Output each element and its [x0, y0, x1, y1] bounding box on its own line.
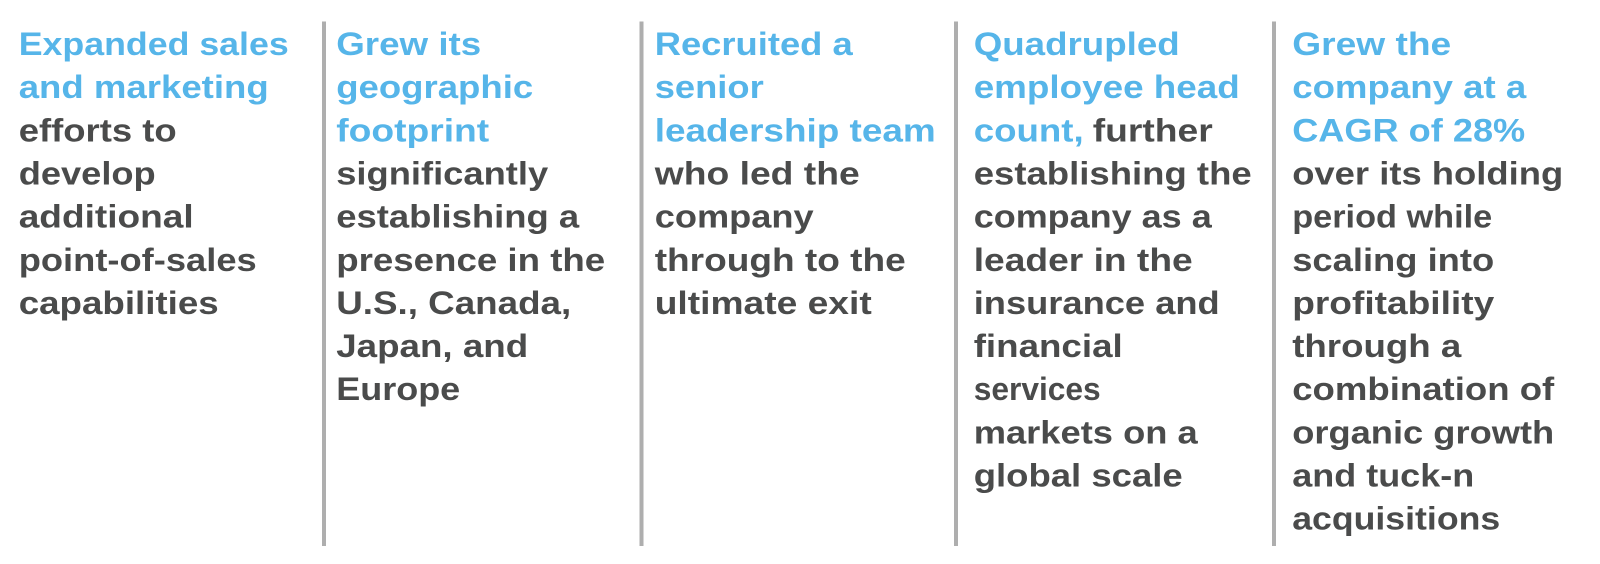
column 2 body text: presence in the — [336, 242, 605, 278]
column 4 body text: services — [974, 371, 1101, 407]
column 3: senior leadership team — [654, 26, 936, 321]
column 5 body text: organic growth — [1292, 414, 1554, 450]
column 4 body text: global scale — [974, 458, 1183, 494]
column 1 body text: capabilities — [19, 285, 219, 321]
column 4 heading: count, — [974, 112, 1084, 148]
column 3 heading: senior — [655, 69, 764, 105]
column 5 body text: over its holding — [1292, 156, 1563, 192]
column 2 heading: footprint — [336, 112, 490, 148]
column 4 body text: leader in the — [974, 242, 1193, 278]
column 4 heading — [974, 26, 1240, 148]
column 5 body text: and tuck-n — [1292, 458, 1474, 494]
column 4: employee head count — [974, 26, 1252, 494]
column 4 body text: insurance and — [974, 285, 1220, 321]
column 2 body text: significantly — [336, 156, 548, 192]
column 4 body text: markets on a — [974, 414, 1198, 450]
column 4 body text: further — [1093, 112, 1213, 148]
column 3 heading: leadership team — [655, 112, 936, 148]
column 4 body text — [974, 112, 1252, 494]
column 1 body text: additional — [19, 199, 194, 235]
column 5 body text — [1292, 156, 1563, 537]
column 3 heading: Recruited a — [655, 26, 853, 62]
column 3 body text: company — [655, 199, 814, 235]
column 4 body text: establishing the — [974, 156, 1252, 192]
column 2 heading — [336, 26, 533, 148]
column 5 heading: Grew the — [1292, 26, 1451, 62]
column 2 body text: Europe — [336, 371, 460, 407]
column 5: company growth — [1292, 26, 1563, 537]
column 2 heading: Grew its — [336, 26, 481, 62]
column 3 body text: ultimate exit — [655, 285, 872, 321]
column 2 body text: Japan, and — [336, 328, 528, 364]
column 4 heading: Quadrupled — [974, 26, 1180, 62]
column 1 heading: Expanded sales — [19, 26, 289, 62]
column 3 body text: through to the — [655, 242, 906, 278]
column 2: geographic footprint — [336, 26, 605, 407]
column 2 body text: U.S., Canada, — [336, 285, 571, 321]
column 5 body text: through a — [1292, 328, 1461, 364]
column 1 body text: point-of-sales — [19, 242, 257, 278]
column 5 body text: acquisitions — [1292, 501, 1500, 537]
column 1 body text — [19, 112, 257, 321]
column 3 body text — [654, 156, 906, 321]
column 5 heading — [1292, 26, 1526, 148]
column 5 body text: combination of — [1292, 371, 1555, 407]
column 5 body text: profitability — [1292, 285, 1494, 321]
column 4 body text: company as a — [974, 199, 1212, 235]
column 5 body text: period while — [1292, 199, 1492, 235]
column 5 heading: company at a — [1292, 69, 1526, 105]
column 2 body text — [336, 156, 605, 407]
column 1 body text: develop — [19, 156, 156, 192]
column 3 heading — [655, 26, 936, 148]
column 2 body text: establishing a — [336, 199, 579, 235]
column 5 body text: scaling into — [1292, 242, 1494, 278]
column 5 heading: CAGR of 28% — [1292, 112, 1525, 148]
column 1 body text: efforts to — [19, 112, 177, 148]
column 1 heading: and marketing — [19, 69, 269, 105]
column 4 body text: financial — [974, 328, 1123, 364]
column 4 heading: employee head — [974, 69, 1240, 105]
column 3 body text: who led the — [654, 156, 860, 192]
column 2 heading: geographic — [336, 69, 533, 105]
column 1: sales and marketing — [19, 26, 289, 321]
column 1 heading — [19, 26, 289, 105]
